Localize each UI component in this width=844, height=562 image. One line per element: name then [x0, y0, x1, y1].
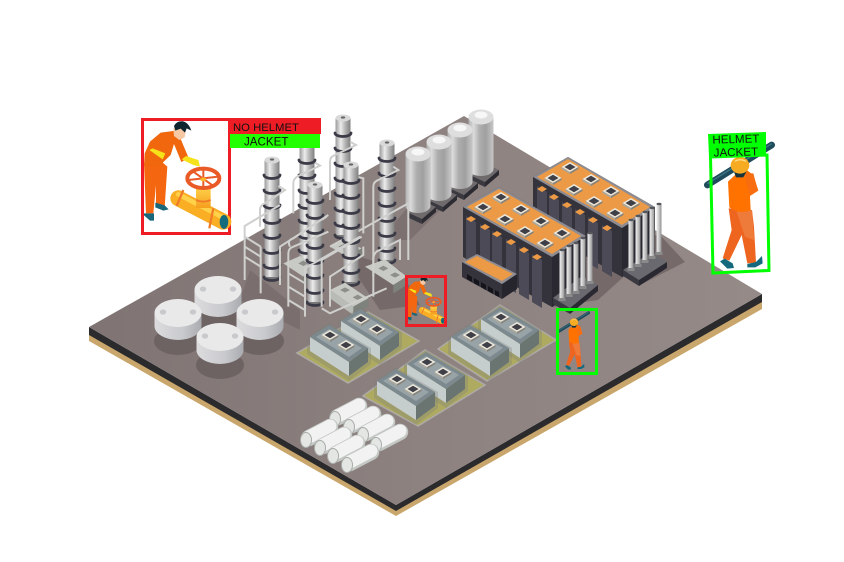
annex with orange roof — [462, 254, 517, 299]
small helmet worker detection — [558, 310, 596, 374]
oil tanks — [154, 276, 284, 379]
chimneys: rear block — [623, 203, 667, 286]
label: no helmet, jacket: JACKET — [244, 136, 288, 148]
chimneys: front block — [553, 232, 598, 314]
floor shadows — [240, 205, 685, 330]
white tubes — [300, 405, 400, 472]
label: no helmet, jacket: NO HELMET — [233, 122, 299, 134]
building: front block — [463, 187, 586, 308]
distillation columns and pipework — [245, 114, 408, 317]
cooling unit pad C — [438, 305, 556, 381]
label: helmet, jacket: HELMET — [712, 132, 760, 147]
label: helmet, jacket: JACKET — [714, 145, 758, 160]
small valve worker detection — [406, 276, 446, 326]
building: rear block — [533, 157, 655, 277]
label: no helmet, jacket — [230, 118, 321, 148]
enlarged worker: no helmet — [142, 120, 230, 234]
cooling unit pad A — [297, 307, 419, 383]
label: helmet, jacket — [708, 132, 766, 160]
factory platform — [89, 116, 762, 516]
storage silos — [406, 110, 499, 224]
enlarged worker: helmet and jacket — [707, 144, 772, 273]
cooling unit pad B — [363, 350, 485, 426]
